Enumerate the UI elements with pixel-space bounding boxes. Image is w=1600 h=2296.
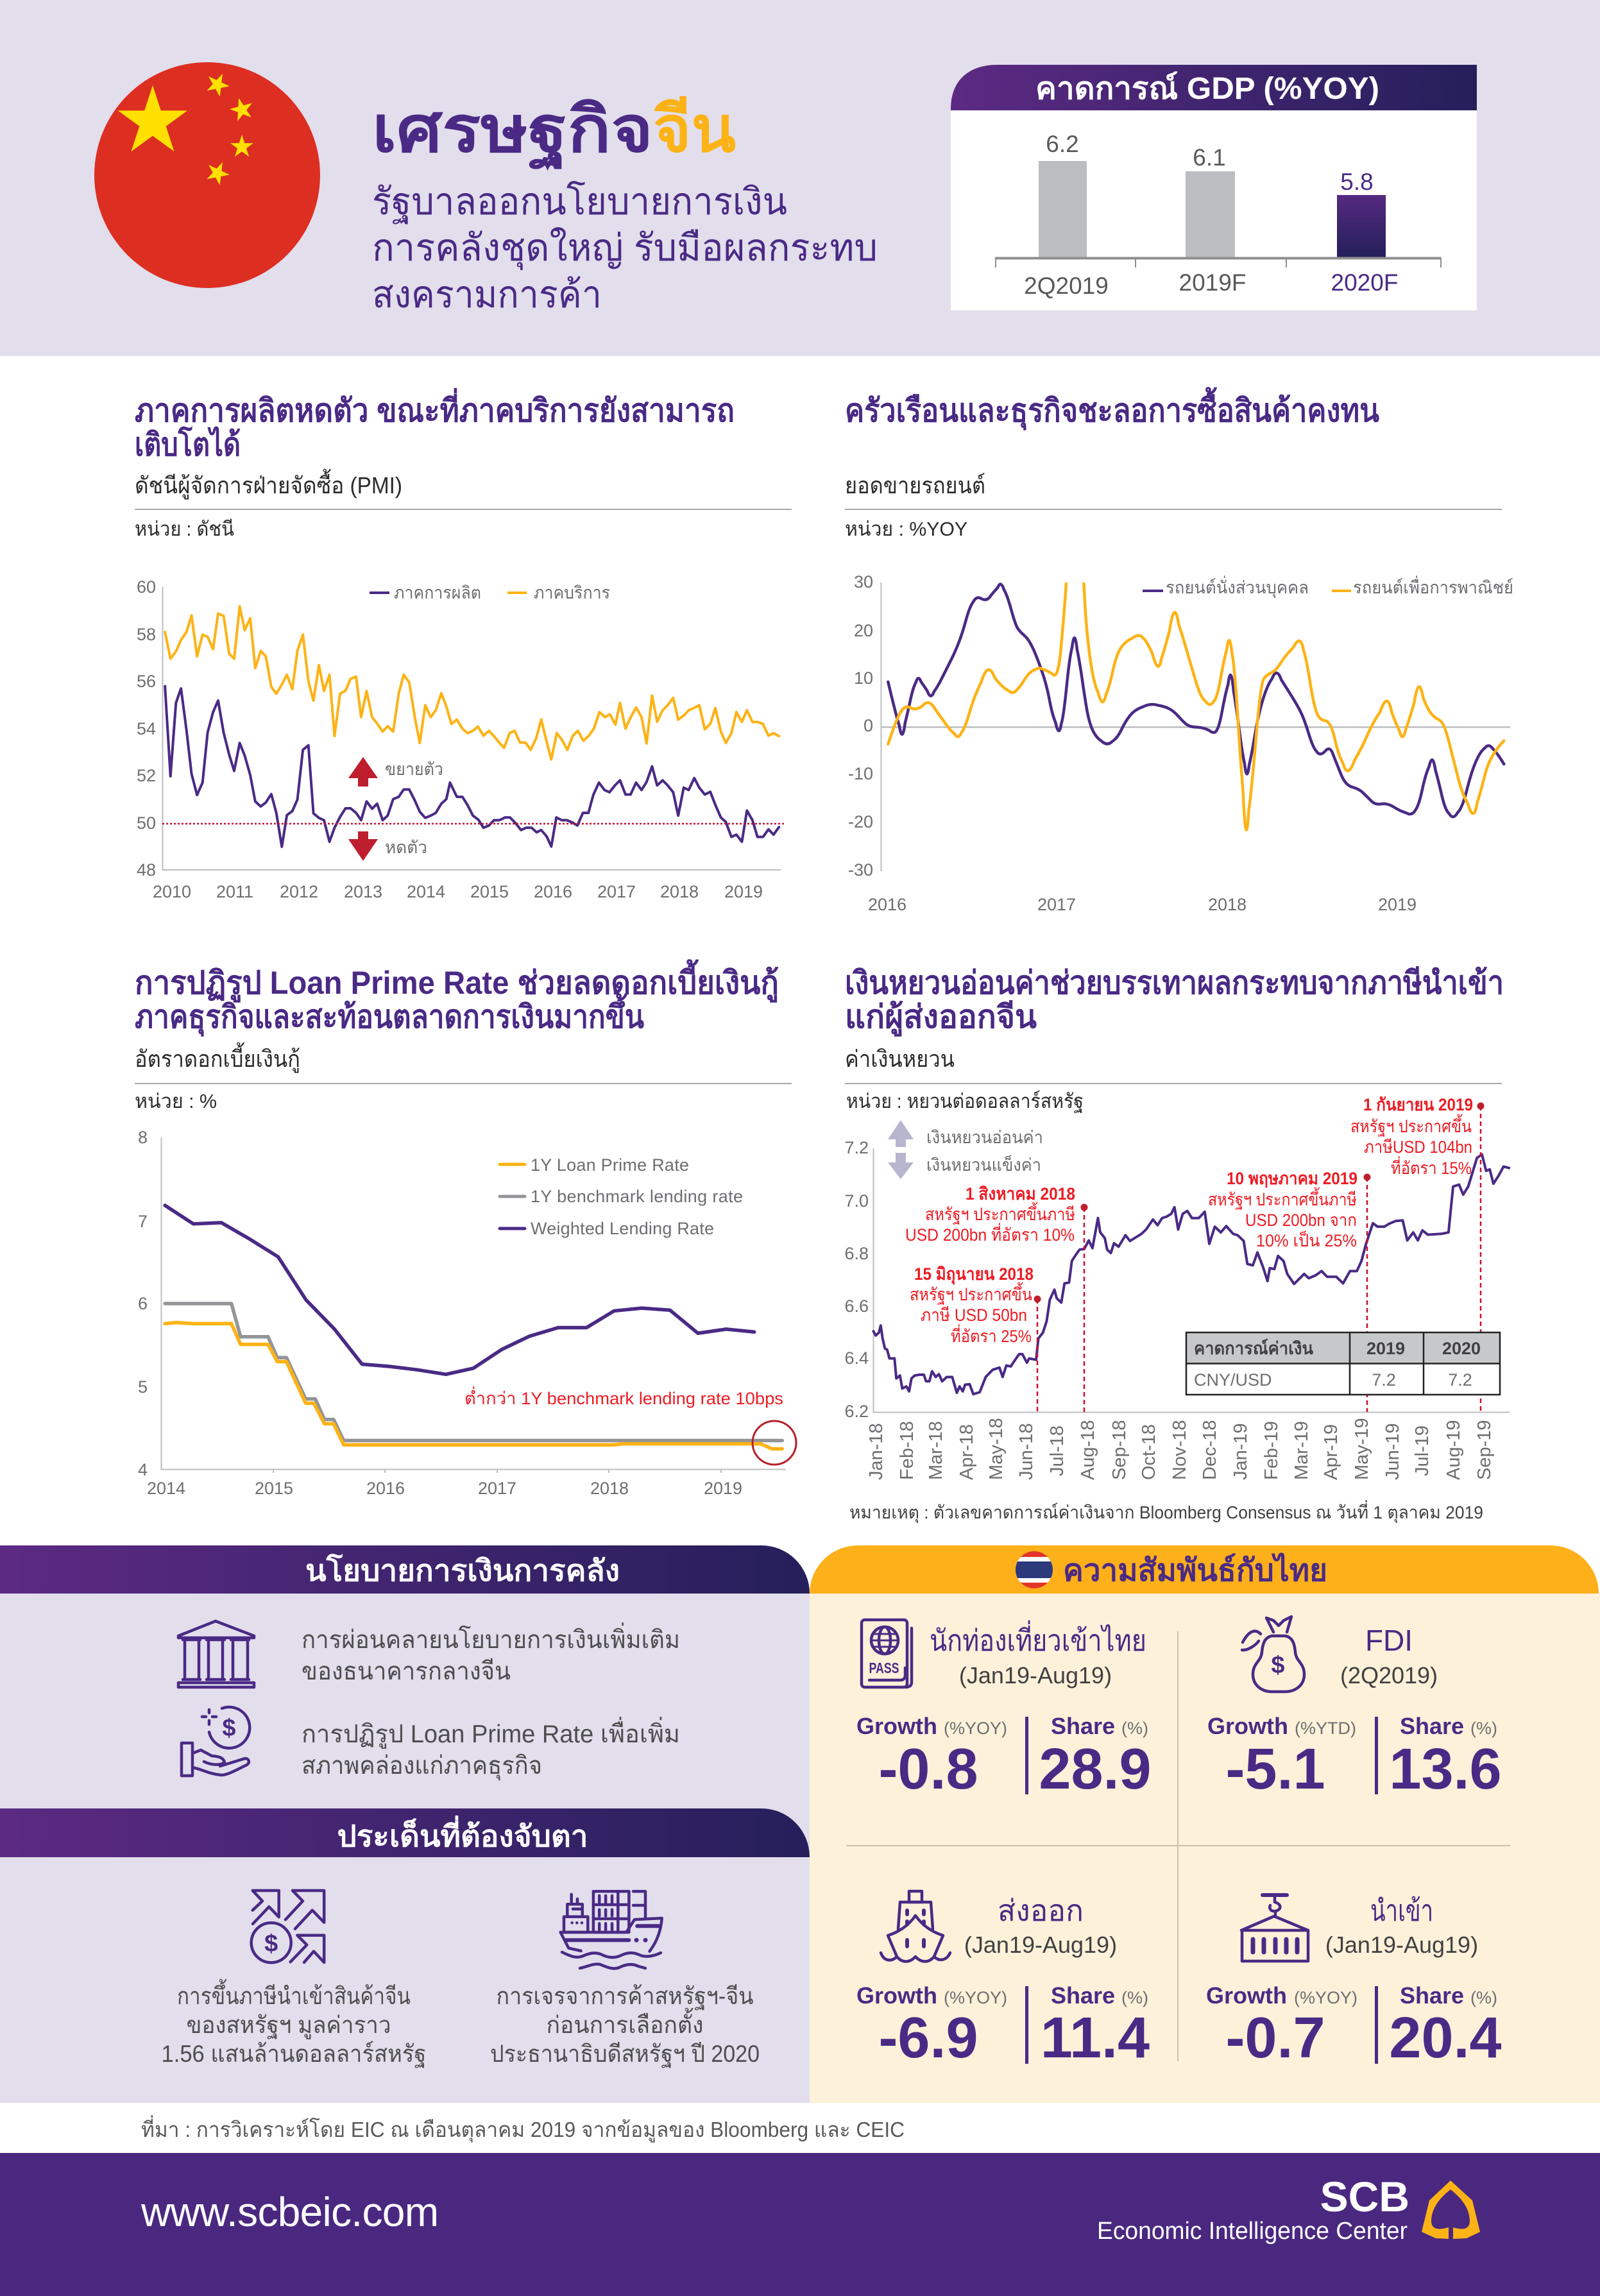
- panel: issues to watch: [0, 1808, 810, 2068]
- text: easing: การผ่อนคลายนโยบายการเงินเพิ่มเติม: [302, 1622, 680, 1654]
- stat: imports: -0.7: [1225, 2006, 1325, 2070]
- stat: tourists: Share: [1051, 1713, 1115, 1739]
- stat: imports: นำเข้า: [1370, 1894, 1433, 1927]
- line chart: PMI: 2013: [344, 882, 382, 901]
- line chart: CNY/USD: May-19: [1352, 1418, 1372, 1480]
- line chart: CNY/USD: Jan-18: [866, 1423, 887, 1480]
- subtitle: สงครามการค้า: [372, 274, 602, 316]
- arrow: expansion: ขยายตัว: [385, 760, 443, 779]
- callout: [464, 1386, 796, 1465]
- line chart: car sales: 2016: [868, 895, 906, 914]
- line chart: CNY/USD: 6.6: [844, 1297, 869, 1316]
- table: currency forecast: 2019: [1366, 1339, 1405, 1358]
- callout: 1 August 2018: USD 200bn ที่อัตรา 10%: [905, 1223, 1075, 1245]
- table: currency forecast: 7.2: [1448, 1370, 1472, 1390]
- legend: [1143, 575, 1513, 599]
- table: currency forecast: 7.2: [1372, 1370, 1396, 1390]
- panel: loan prime rate: อัตราดอกเบี้ยเงินกู้: [135, 1042, 300, 1073]
- panel: car sales: ครัวเรือนและธุรกิจชะลอการซื้อสินค้าคงทน: [845, 387, 1379, 430]
- heading bar: นโยบายการเงินการคลัง: [305, 1553, 620, 1587]
- line chart: PMI: [137, 577, 786, 901]
- line chart: car sales: -30: [848, 860, 873, 880]
- icon: passport: [862, 1620, 912, 1687]
- line chart: CNY/USD: Feb-19: [1261, 1421, 1282, 1480]
- heading: เติบโตได้: [135, 425, 241, 463]
- line chart: lending rates: 6: [138, 1294, 148, 1313]
- icon: cargo ship: [561, 1891, 662, 1968]
- panel: GDP forecast: คาดการณ์ GDP (%YOY): [1035, 71, 1379, 106]
- stat: exports: (%): [1121, 1988, 1148, 2007]
- line chart: car sales: 2019: [1378, 895, 1417, 914]
- panel: PMI: ดัชนีผู้จัดการฝ่ายจัดซื้อ (PMI): [135, 468, 402, 500]
- callout: 1 September 2019: [1350, 1095, 1473, 1178]
- stat: FDI: FDI: [1365, 1624, 1413, 1657]
- table: currency forecast: CNY/USD: [1194, 1370, 1272, 1390]
- heading bar: [0, 1808, 810, 1857]
- stat: tourists: [856, 1620, 1152, 1801]
- line chart: lending rates: 2015: [255, 1479, 293, 1498]
- icon: SCB logo: [1422, 2181, 1480, 2239]
- legend: yuan direction arrows: เงินหยวนแข็งค่า: [926, 1153, 1041, 1175]
- line chart: car sales: 2017: [1037, 895, 1076, 914]
- stat: imports: Share: [1400, 1982, 1464, 2009]
- line chart: CNY/USD: Jan-19: [1230, 1423, 1251, 1480]
- panel: GDP forecast: 2Q2019: [1024, 273, 1109, 299]
- event markers: [1037, 1106, 1481, 1412]
- panel: relationship with Thailand: [810, 1545, 1600, 2103]
- icon: tariff arrows: [251, 1891, 324, 1962]
- stat: FDI: (%YTD): [1295, 1719, 1356, 1738]
- icon: tariff arrows: $: [264, 1930, 278, 1957]
- panel: GDP forecast: 6.2: [1046, 131, 1079, 157]
- callout: 1 August 2018: [905, 1184, 1075, 1245]
- line chart: PMI: 2019: [724, 882, 763, 901]
- panel: loan prime rate: หน่วย : %: [135, 1090, 217, 1112]
- panel: car sales: ยอดขายรถยนต์: [845, 472, 985, 498]
- legend: 1Y benchmark lending rate: [531, 1187, 743, 1206]
- line chart: lending rates: [138, 1128, 796, 1498]
- icon: Thai flag: [1016, 1551, 1053, 1588]
- line chart: lending rates: 2019: [704, 1479, 742, 1498]
- stat: FDI: Share: [1400, 1713, 1464, 1739]
- stat: imports: (%YOY): [1294, 1988, 1357, 2007]
- line chart: PMI: 52: [137, 766, 156, 785]
- panel: GDP forecast: 5.8: [1340, 169, 1374, 195]
- stat: exports: -6.9: [878, 2006, 978, 2070]
- line chart: lending rates: 2014: [147, 1479, 185, 1498]
- table: currency forecast: คาดการณ์ค่าเงิน: [1194, 1338, 1314, 1358]
- legend: yuan direction arrows: เงินหยวนอ่อนค่า: [926, 1128, 1043, 1147]
- panel: loan prime rate: การปฏิรูป Loan Prime Rate ช่วยลดดอกเบี้ยเงินกู้: [135, 959, 779, 1003]
- stat: tourists: -0.8: [878, 1737, 978, 1801]
- line chart: PMI: 60: [137, 577, 156, 597]
- legend: yuan direction arrows: [888, 1120, 1043, 1179]
- line chart: CNY/USD: 7.0: [844, 1191, 869, 1211]
- line chart: CNY/USD: Mar-19: [1291, 1421, 1312, 1480]
- callout: 15 June 2018: สหรัฐฯ ประกาศขึ้น: [910, 1282, 1032, 1305]
- callout: 10 May 2019: สหรัฐฯ ประกาศขึ้นภาษี: [1208, 1187, 1357, 1210]
- panel: GDP forecast: 6.1: [1193, 144, 1226, 171]
- text: trade talks: ก่อนการเลือกตั้ง: [547, 2007, 703, 2038]
- text: trade talks: ประธานาธิบดีสหรัฐฯ ปี 2020: [490, 2041, 760, 2068]
- text: LPR reform: สภาพคล่องแก่ภาคธุรกิจ: [302, 1752, 542, 1781]
- panel: yuan: หน่วย : หยวนต่อดอลลาร์สหรัฐ: [846, 1090, 1084, 1113]
- stat: FDI: -5.1: [1225, 1737, 1325, 1801]
- line chart: car sales: 30: [854, 572, 873, 591]
- line chart: car sales: -10: [848, 764, 873, 783]
- line chart: lending rates: 5: [138, 1377, 148, 1397]
- stat: imports: [1206, 1894, 1502, 2070]
- line chart: CNY/USD: Aug-18: [1078, 1420, 1098, 1480]
- line chart: PMI: 2014: [407, 882, 445, 901]
- line chart: car sales: 0: [864, 716, 873, 735]
- line chart: lending rates: 2018: [590, 1479, 629, 1498]
- line chart: PMI: 54: [137, 719, 156, 738]
- heading bar: [810, 1545, 1599, 1594]
- legend: ภาคบริการ: [534, 583, 610, 602]
- stat: exports: [856, 1891, 1150, 2070]
- source: ที่มา : การวิเคราะห์โดย EIC ณ เดือนตุลาคม 2019 จากข้อมูลของ Bloomberg และ CEIC: [141, 2115, 905, 2143]
- callout: 10 May 2019: 10% เป็น 25%: [1256, 1229, 1357, 1250]
- line chart: PMI: 58: [137, 625, 156, 644]
- note: หมายเหตุ : ตัวเลขคาดการณ์ค่าเงินจาก Bloomberg Consensus ณ วันที่ 1 ตุลาคม 2019: [849, 1500, 1483, 1524]
- panel: car sales: หน่วย : %YOY: [845, 518, 967, 540]
- legend: Weighted Lending Rate: [531, 1219, 714, 1238]
- panel: PMI: [135, 388, 792, 901]
- line chart: PMI: 2018: [660, 882, 699, 901]
- callout: 1 September 2019: ภาษีUSD 104bn: [1364, 1137, 1472, 1157]
- stat: tourists: 28.9: [1039, 1737, 1152, 1801]
- callout: 1 September 2019: สหรัฐฯ ประกาศขึ้น: [1350, 1114, 1472, 1137]
- line chart: CNY/USD: Sep-18: [1109, 1420, 1130, 1480]
- panel: PMI: หน่วย : ดัชนี: [135, 518, 234, 540]
- icon: bank: [178, 1621, 254, 1687]
- panel: yuan: [844, 965, 1510, 1524]
- line chart: car sales: -20: [848, 812, 873, 831]
- table: currency forecast: 2020: [1442, 1339, 1481, 1358]
- panel: car sales: [845, 387, 1513, 914]
- arrow: expansion: [348, 757, 443, 787]
- text: US tariffs: ของสหรัฐฯ มูลค่าราว: [186, 2012, 391, 2039]
- callout: 15 June 2018: 15 มิถุนายน 2018: [914, 1264, 1034, 1285]
- stat: tourists: Growth: [856, 1713, 937, 1739]
- icon: hand with coin: $: [222, 1715, 236, 1742]
- panel: monetary and fiscal policy: [0, 1545, 810, 2103]
- stat: exports: ส่งออก: [998, 1894, 1084, 1927]
- line chart: PMI: 50: [137, 813, 156, 833]
- heading: ภาคการผลิตหดตัว ขณะที่ภาคบริการยังสามารถ: [135, 388, 735, 429]
- subtitle: การคลังชุดใหญ่ รับมือผลกระทบ: [372, 226, 878, 271]
- stat: exports: Share: [1051, 1982, 1115, 2009]
- stat: tourists: นักท่องเที่ยวเข้าไทย: [930, 1620, 1146, 1657]
- arrow: contraction: [348, 831, 427, 861]
- panel: GDP forecast: 2020F: [1331, 269, 1398, 296]
- stat: tourists: (%): [1121, 1719, 1148, 1738]
- line chart: CNY/USD: 6.8: [844, 1244, 869, 1263]
- icon: China flag circle: [94, 62, 320, 288]
- logo text: Economic Intelligence Center: [1097, 2218, 1408, 2245]
- callout: ต่ำกว่า 1Y benchmark lending rate 10bps: [464, 1386, 783, 1408]
- line chart: PMI: 48: [137, 860, 156, 880]
- line chart: PMI: 2015: [470, 882, 509, 901]
- text: trade talks: การเจรจาการค้าสหรัฐฯ-จีน: [497, 1983, 753, 2011]
- stat: exports: (Jan19-Aug19): [964, 1932, 1117, 1958]
- line chart: car sales: 2018: [1208, 895, 1247, 914]
- line chart: PMI: 2016: [534, 882, 572, 901]
- line chart: lending rates: 7: [138, 1212, 148, 1231]
- heading bar: ความสัมพันธ์กับไทย: [1063, 1552, 1327, 1588]
- stat: tourists: (%YOY): [944, 1719, 1007, 1738]
- text: trade talks: [490, 1983, 760, 2068]
- callout: 1 September 2019: 1 กันยายน 2019: [1363, 1095, 1473, 1114]
- line chart: PMI: 56: [137, 672, 156, 691]
- line chart: car sales: [848, 572, 1513, 914]
- stat: FDI: (2Q2019): [1340, 1662, 1438, 1688]
- logo text: [1097, 2173, 1409, 2245]
- arrow: contraction: หดตัว: [385, 838, 427, 857]
- text: LPR reform: [302, 1717, 680, 1781]
- heading: [135, 388, 735, 463]
- callout: 10 May 2019: USD 200bn จาก: [1245, 1211, 1357, 1230]
- stat: imports: (Jan19-Aug19): [1325, 1932, 1478, 1958]
- stat: exports: (%YOY): [944, 1988, 1007, 2007]
- text: easing: ของธนาคารกลางจีน: [302, 1658, 511, 1685]
- line chart: lending rates: 2016: [366, 1479, 405, 1498]
- stat: FDI: [1207, 1617, 1502, 1801]
- title: [372, 94, 736, 171]
- icon: hand with coin: [182, 1707, 250, 1776]
- line chart: CNY/USD: Oct-18: [1139, 1424, 1159, 1480]
- line chart: CNY/USD: Jul-19: [1412, 1425, 1433, 1476]
- line chart: CNY/USD: [844, 1095, 1510, 1480]
- stat: imports: 20.4: [1389, 2006, 1502, 2070]
- logo text: SCB: [1320, 2173, 1409, 2220]
- text: US tariffs: 1.56 แสนล้านดอลลาร์สหรัฐ: [162, 2041, 426, 2068]
- line chart: PMI: 2017: [597, 882, 636, 901]
- line chart: CNY/USD: Jun-19: [1383, 1423, 1403, 1480]
- website: www.scbeic.com: [140, 2189, 439, 2235]
- text: LPR reform: การปฏิรูป Loan Prime Rate เพื่อเพิ่ม: [302, 1717, 680, 1749]
- callout: 1 September 2019: ที่อัตรา 15%: [1391, 1156, 1472, 1178]
- callout: 1 August 2018: สหรัฐฯ ประกาศขึ้นภาษี: [925, 1202, 1075, 1225]
- stat: FDI: 13.6: [1389, 1737, 1502, 1801]
- panel: yuan: แก่ผู้ส่งออกจีน: [845, 999, 1037, 1037]
- legend: รถยนต์เพื่อการพาณิชย์: [1353, 575, 1513, 597]
- callout: 10 May 2019: 10 พฤษภาคม 2019: [1227, 1169, 1357, 1188]
- line chart: CNY/USD: Feb-18: [897, 1421, 917, 1480]
- title: จีน: [653, 94, 736, 166]
- footer: [0, 2153, 1600, 2296]
- icon: ship front: [881, 1891, 950, 1962]
- stat: tourists: (Jan19-Aug19): [959, 1662, 1112, 1688]
- line chart: car sales: 10: [854, 668, 873, 688]
- icon: passport: PASS: [869, 1660, 899, 1676]
- line chart: CNY/USD: Apr-18: [957, 1424, 977, 1480]
- stat: FDI: (%): [1470, 1719, 1497, 1738]
- stat: imports: (%): [1470, 1988, 1497, 2007]
- callout: 10 May 2019: [1208, 1169, 1357, 1250]
- line chart: CNY/USD: Jul-18: [1047, 1425, 1068, 1476]
- line chart: CNY/USD: 6.2: [844, 1402, 869, 1421]
- legend: 1Y Loan Prime Rate: [531, 1155, 689, 1175]
- line chart: CNY/USD: Apr-19: [1321, 1424, 1341, 1480]
- legend: [370, 583, 610, 602]
- stat: imports: Growth: [1206, 1982, 1287, 2009]
- text: US tariffs: [162, 1978, 426, 2068]
- stat: FDI: Growth: [1207, 1713, 1288, 1739]
- callout: 15 June 2018: [910, 1264, 1034, 1346]
- line chart: CNY/USD: Nov-18: [1170, 1420, 1190, 1480]
- panel: yuan: ค่าเงินหยวน: [845, 1046, 955, 1072]
- subtitle: รัฐบาลออกนโยบายการเงิน: [372, 180, 787, 224]
- panel: loan prime rate: [135, 959, 796, 1498]
- panel: yuan: เงินหยวนอ่อนค่าช่วยบรรเทาผลกระทบจากภาษีนำเข้า: [845, 965, 1504, 1001]
- title: เศรษฐกิจ: [372, 94, 653, 171]
- line chart: CNY/USD: May-18: [986, 1418, 1007, 1480]
- line chart: car sales: 20: [854, 621, 873, 640]
- icon: container on crane: [1241, 1895, 1308, 1961]
- panel: GDP forecast: 2019F: [1179, 269, 1246, 296]
- line chart: CNY/USD: Aug-19: [1443, 1420, 1464, 1480]
- legend: [500, 1155, 743, 1238]
- text: US tariffs: การขึ้นภาษีนำเข้าสินค้าจีน: [177, 1978, 411, 2009]
- callout: 1 August 2018: 1 สิงหาคม 2018: [966, 1184, 1075, 1203]
- text: easing: [302, 1622, 680, 1685]
- legend: ภาคการผลิต: [394, 583, 481, 602]
- panel: GDP forecast: [951, 65, 1477, 310]
- line chart: CNY/USD: Jun-18: [1016, 1423, 1037, 1480]
- line chart: CNY/USD: 7.2: [844, 1138, 869, 1157]
- icon: money bag: $: [1271, 1652, 1285, 1679]
- stat: exports: 11.4: [1041, 2006, 1150, 2070]
- icon: money bag: [1242, 1617, 1304, 1692]
- line chart: lending rates: 4: [138, 1460, 148, 1479]
- heading bar: ประเด็นที่ต้องจับตา: [337, 1816, 588, 1853]
- line chart: lending rates: 8: [138, 1128, 148, 1147]
- line chart: CNY/USD: Dec-18: [1200, 1420, 1220, 1480]
- callout: 15 June 2018: ที่อัตรา 25%: [951, 1324, 1032, 1346]
- panel: loan prime rate: ภาคธุรกิจและสะท้อนตลาดการเงินมากขึ้น: [135, 993, 644, 1037]
- stat: exports: Growth: [856, 1982, 937, 2009]
- callout: 15 June 2018: ภาษี USD 50bn: [921, 1305, 1027, 1325]
- line chart: CNY/USD: Mar-18: [926, 1421, 946, 1480]
- heading bar: [0, 1545, 810, 1594]
- subtitle: [372, 180, 878, 316]
- line chart: PMI: 2010: [153, 882, 191, 901]
- line chart: lending rates: 2017: [478, 1479, 516, 1498]
- header band: [0, 0, 1600, 356]
- line chart: PMI: 2011: [216, 882, 253, 901]
- legend: รถยนต์นั่งส่วนบุคคล: [1166, 575, 1309, 599]
- line chart: CNY/USD: Sep-19: [1474, 1420, 1495, 1480]
- line chart: PMI: 2012: [280, 882, 318, 901]
- line chart: CNY/USD: 6.4: [844, 1348, 869, 1368]
- table: currency forecast: [1186, 1332, 1500, 1395]
